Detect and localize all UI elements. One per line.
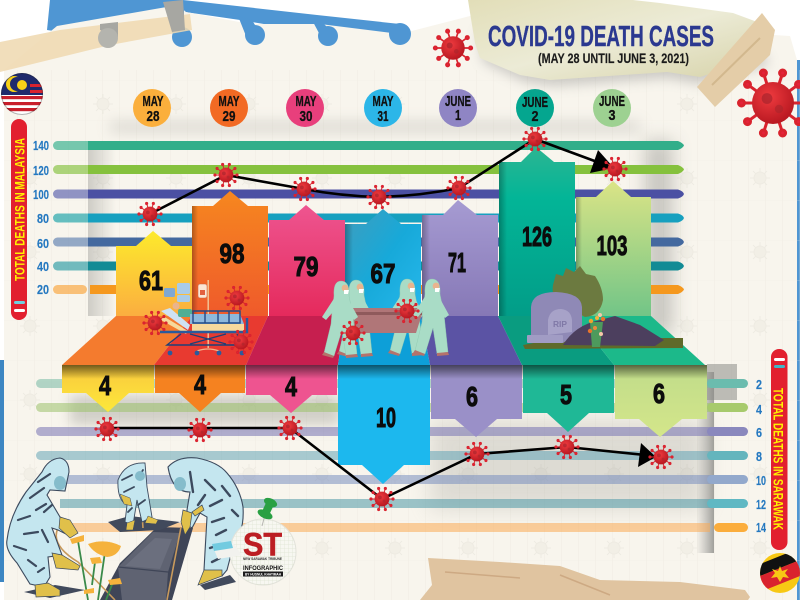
date circles: 1	[455, 107, 461, 124]
date circles: MAY	[296, 93, 316, 110]
date circles: 31	[378, 108, 388, 125]
upper bar values: 67	[370, 258, 396, 289]
flowers	[70, 535, 122, 600]
upper bar values: 61	[139, 265, 163, 296]
burial workers illustration	[7, 458, 243, 600]
title: (MAY 28 UNTIL JUNE 3, 2021)	[538, 51, 689, 66]
date circles: 28	[146, 108, 160, 125]
worker right	[168, 458, 243, 585]
New Sarawak Tribune infographic badge	[212, 496, 296, 585]
date circles: MAY	[142, 93, 164, 110]
Malaysia trend line with arrow	[138, 127, 627, 226]
virus icon near title	[434, 30, 472, 66]
axis labels: Malaysia: 100	[33, 187, 49, 202]
upper bars: Malaysia daily deaths	[116, 147, 651, 316]
beige tape top left	[0, 0, 192, 72]
axis labels: Sarawak: 14	[756, 520, 767, 535]
gravestone scene	[523, 266, 683, 349]
date circles: 2	[532, 108, 538, 125]
New Sarawak Tribune infographic badge: INFOGRAPHIC	[243, 565, 283, 572]
date circles: JUNE	[599, 93, 625, 110]
date circles: 3	[608, 107, 616, 124]
New Sarawak Tribune infographic badge: BY HUSNUL KHATIMAH	[245, 572, 281, 576]
date circles: JUNE	[445, 93, 471, 110]
worker left	[7, 458, 80, 597]
Malaysia flag	[0, 72, 44, 116]
axis labels: Malaysia: 40	[37, 259, 49, 274]
date circles: MAY	[218, 93, 240, 110]
worker middle	[118, 463, 158, 530]
lower bar values: 10	[376, 402, 396, 433]
axis labels: Malaysia: 140	[33, 138, 49, 153]
left pill: total deaths in Malaysia	[11, 119, 28, 320]
axis labels: Malaysia: 80	[37, 211, 49, 226]
lower bar values: 4	[285, 371, 297, 402]
axis labels: Sarawak	[756, 377, 767, 535]
date circles: MAY	[372, 93, 394, 110]
axis labels: Malaysia: 60	[37, 236, 49, 251]
lower bar values: 5	[560, 379, 572, 410]
right pill: total deaths in Sarawak	[770, 349, 788, 550]
upper bar values: 103	[596, 230, 628, 261]
tape top right	[697, 13, 775, 107]
axis labels: Sarawak: 6	[756, 425, 762, 440]
Sarawak trend line with arrow	[95, 416, 673, 511]
axis labels: Sarawak: 4	[756, 402, 763, 417]
Sarawak flag	[760, 553, 800, 593]
lower bar values	[99, 369, 665, 433]
axis labels: Sarawak: 12	[756, 497, 766, 512]
pallbearers carrying coffin	[322, 279, 449, 358]
upper bar values: 126	[522, 221, 552, 252]
axis labels: Malaysia: 120	[33, 163, 49, 178]
upper bar values: 79	[294, 251, 318, 282]
title	[488, 21, 714, 66]
upper bar values	[139, 221, 628, 296]
left pill: total deaths in Malaysia: TOTAL DEATHS IN MALAYSIA	[12, 138, 28, 281]
lower bar values: 4	[194, 369, 206, 400]
date circles: JUNE	[522, 94, 548, 111]
lower bar values: 6	[466, 381, 478, 412]
axis labels: Malaysia	[33, 138, 49, 297]
chart shadows	[70, 122, 737, 553]
gravestone scene: RIP	[553, 320, 568, 329]
axis labels: Sarawak: 10	[756, 473, 766, 488]
lower gridlines: Sarawak scale	[36, 379, 748, 532]
axis labels: Sarawak: 2	[756, 377, 762, 392]
upper bar values: 71	[448, 247, 466, 278]
lower bars: Sarawak daily deaths	[62, 365, 707, 484]
hospital bed illustration	[143, 280, 253, 355]
bottom tape	[420, 558, 750, 600]
right pill: total deaths in Sarawak: TOTAL DEATHS IN SARAWAK	[770, 388, 786, 530]
folded floor	[62, 316, 705, 365]
title paper	[468, 0, 770, 86]
date circles	[133, 89, 631, 127]
upper bar values: 98	[220, 238, 244, 269]
large virus icon right	[738, 70, 800, 136]
date circles: 30	[300, 108, 312, 125]
blue paper clips	[172, 5, 411, 47]
date circles: 29	[222, 108, 236, 125]
New Sarawak Tribune infographic badge: NEW SARAWAK TRIBUNE	[243, 557, 283, 561]
axis labels: Malaysia: 20	[37, 282, 49, 297]
New Sarawak Tribune infographic badge: ST	[243, 526, 282, 562]
lower bar values: 6	[653, 378, 665, 409]
axis labels: Sarawak: 8	[756, 449, 762, 464]
upper gridlines: Malaysia scale	[53, 141, 684, 294]
lower bar values: 4	[99, 370, 111, 401]
